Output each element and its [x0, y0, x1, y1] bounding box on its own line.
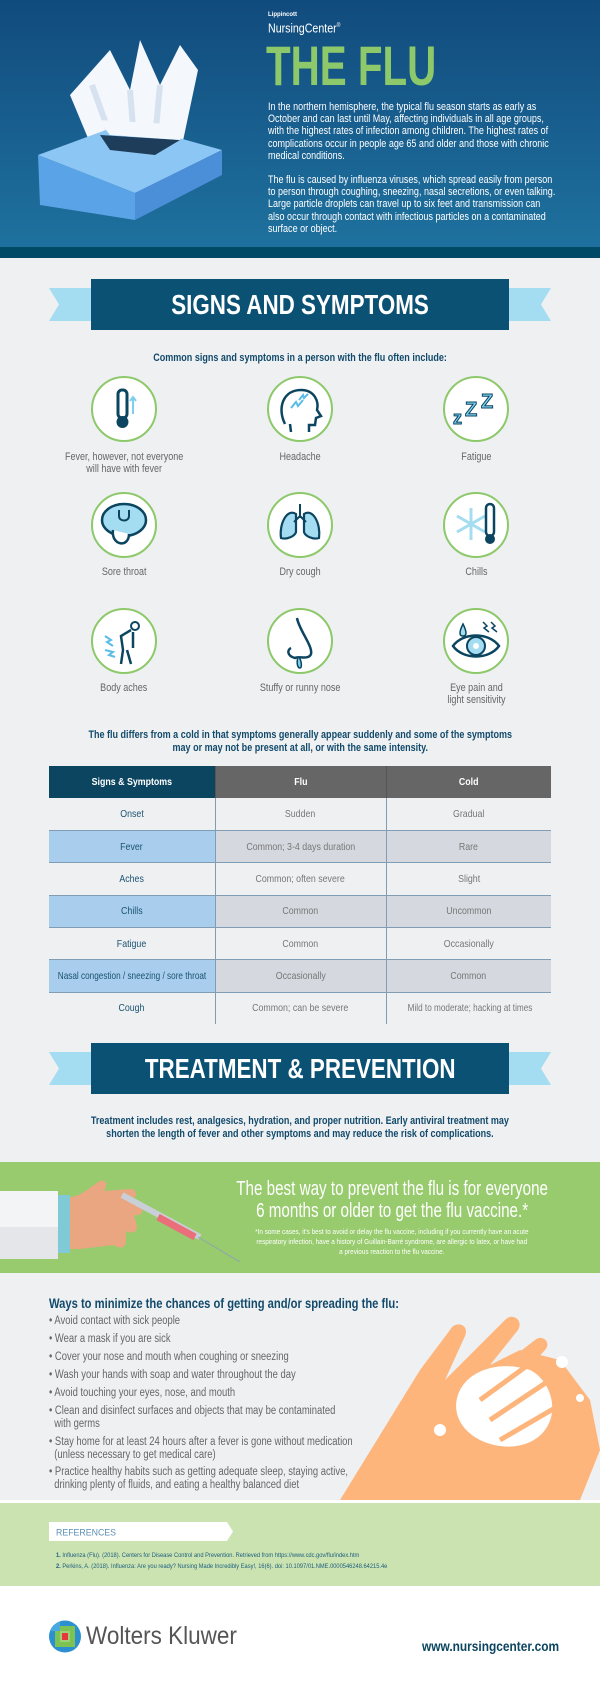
- comparison table: Occasionally: [275, 970, 326, 982]
- label: fatigue: Fatigue: [461, 451, 491, 463]
- logo: NursingCenter: Lippincott: [268, 12, 297, 18]
- vaccine footnote: [255, 1227, 529, 1256]
- prevention list: with germs: [54, 1418, 100, 1430]
- comparison table: Fatigue: [117, 938, 146, 950]
- label: fever: will have with fever: [86, 463, 162, 475]
- vaccine headline: [236, 1178, 548, 1222]
- footer url: www.nursingcenter.com: [422, 1638, 559, 1654]
- intro text: Large particle droplets can travel up to six feet and transmission can: [268, 198, 540, 210]
- references list: 2. Perkins, A. (2018). Influenza: Are you ready? Nursing Made Incredibly Easy!, 16(6). doi: 10.1097/01.NME.0000546248.64215.4e: [56, 1563, 387, 1570]
- label: fever: Fever, however, not everyone: [65, 451, 183, 463]
- label: sore throat: Sore throat: [102, 566, 146, 578]
- logo: NursingCenter: [268, 12, 340, 35]
- prevention list: • Stay home for at least 24 hours after a fever is gone without medication: [49, 1436, 353, 1448]
- comparison table: [49, 766, 551, 1024]
- comparison table: Common; 3-4 days duration: [246, 841, 355, 853]
- banner: treatment and prevention: TREATMENT & PREVENTION: [145, 1053, 455, 1084]
- intro text: with the highest rates of infection among children. The highest rates of: [268, 125, 548, 137]
- treatment text: [90, 1115, 509, 1140]
- intro text: to person through coughing, sneezing, nasal secretions, or even talking.: [268, 186, 555, 198]
- references panel: [0, 1503, 600, 1586]
- comparison intro text: [88, 729, 512, 754]
- comparison table: Cough: [119, 1002, 145, 1014]
- vaccine headline: 6 months or older to get the flu vaccine.*: [256, 1200, 528, 1222]
- intro text: In the northern hemisphere, the typical flu season starts as early as: [268, 101, 536, 113]
- comparison table: Aches: [119, 873, 144, 885]
- icon: fatigue: z: [453, 408, 462, 428]
- intro text: October and can last until May, affecting individuals in all age groups,: [268, 113, 544, 125]
- comparison table: Cold: [459, 776, 479, 788]
- icon: tissue box: [38, 40, 222, 220]
- symptom icons grid: [65, 376, 509, 706]
- label: dry cough: Dry cough: [279, 566, 321, 578]
- icon: body aches: [91, 608, 157, 674]
- vaccine footnote: a previous reaction to the flu vaccine.: [339, 1247, 445, 1256]
- logo: NursingCenter: NursingCenter®: [268, 20, 340, 35]
- comparison table: Occasionally: [444, 938, 494, 950]
- label: body aches: Body aches: [100, 682, 148, 694]
- subtitle: Common signs and symptoms in a person with the flu often include:: [153, 352, 447, 364]
- comparison table: Uncommon: [446, 905, 491, 917]
- icon: dry cough: [267, 492, 333, 558]
- prevention list: • Wash your hands with soap and water throughout the day: [49, 1369, 296, 1381]
- comparison table: Rare: [459, 841, 478, 853]
- comparison table: Nasal congestion / sneezing / sore throat: [58, 970, 206, 982]
- prevention list: • Practice healthy habits such as getting adequate sleep, staying active,: [49, 1466, 348, 1478]
- title: THE FLU: [266, 34, 436, 97]
- label: runny nose: Stuffy or runny nose: [260, 682, 340, 694]
- icon: hand with syringe: [0, 1180, 240, 1262]
- vaccine callout band: [0, 1162, 600, 1273]
- prevention list: (unless necessary to get medical care): [54, 1448, 216, 1460]
- label: eye pain: light sensitivity: [447, 694, 505, 706]
- prevention list: drinking plenty of fluids, and eating a healthy balanced diet: [54, 1478, 299, 1490]
- comparison table: Fever: [120, 841, 143, 853]
- comparison table: Slight: [458, 873, 480, 885]
- intro text: surface or object.: [268, 223, 337, 235]
- prevention list: • Wear a mask if you are sick: [49, 1333, 171, 1345]
- comparison table: Gradual: [453, 808, 484, 820]
- label: chills: Chills: [465, 566, 487, 578]
- vaccine headline: The best way to prevent the flu is for everyone: [236, 1178, 548, 1200]
- comparison table: Common; often severe: [256, 873, 345, 885]
- comparison table: Sudden: [285, 808, 316, 820]
- header panel: [0, 0, 600, 258]
- intro text: medical conditions.: [268, 150, 345, 162]
- prevention list: • Cover your nose and mouth when coughing or sneezing: [49, 1351, 289, 1363]
- label: fever: [65, 451, 183, 475]
- icon: fatigue: [443, 376, 509, 442]
- label: eye pain: Eye pain and: [450, 682, 502, 694]
- vaccine footnote: *In some cases, it's best to avoid or delay the flu vaccine, including if you currently have an acute: [255, 1227, 529, 1236]
- comparison table: Onset: [120, 808, 144, 820]
- icon: sore throat: [91, 492, 157, 558]
- comparison table: Common; can be severe: [252, 1002, 349, 1014]
- references list: 1. Influenza (Flu). (2018). Centers for Disease Control and Prevention. Retrieved from https://www.cdc.gov/flu/index.htm: [56, 1552, 359, 1559]
- prevention list: • Avoid contact with sick people: [49, 1315, 180, 1327]
- label: headache: Headache: [279, 451, 321, 463]
- list heading: Ways to minimize the chances of getting and/or spreading the flu:: [49, 1295, 399, 1311]
- treatment text: Treatment includes rest, analgesics, hydration, and proper nutrition. Early antiviral treatment may: [91, 1115, 509, 1127]
- icon: chills: [443, 492, 509, 558]
- label: eye pain: [447, 682, 506, 706]
- comparison table: Chills: [121, 905, 143, 917]
- icon: headache: [267, 376, 333, 442]
- vaccine footnote: respiratory infection, have a history of Guillain-Barré syndrome, are allergic to latex, or have had: [257, 1237, 527, 1246]
- comparison table: Mild to moderate; hacking at times: [407, 1002, 532, 1014]
- prevention list: • Avoid touching your eyes, nose, and mouth: [49, 1387, 235, 1399]
- banner: signs and symptoms: [49, 279, 551, 330]
- comparison table: Common: [283, 938, 318, 950]
- comparison table: Signs & Symptoms: [92, 776, 172, 788]
- icon: runny nose: [267, 608, 333, 674]
- references list: [56, 1552, 388, 1570]
- footer logo: Wolters Kluwer: Wolters Kluwer: [86, 1622, 237, 1650]
- comparison table: Flu: [294, 776, 307, 788]
- comparison table: Common: [451, 970, 487, 982]
- references tag: [49, 1522, 233, 1541]
- treatment text: shorten the length of fever and other symptoms and may reduce the risk of complications.: [106, 1128, 494, 1140]
- banner: signs and symptoms: SIGNS AND SYMPTOMS: [171, 289, 429, 320]
- icon: fever: [91, 376, 157, 442]
- icon: washing hands: [340, 1316, 600, 1500]
- prevention list: [49, 1295, 399, 1490]
- intro text: [268, 101, 555, 235]
- references tag: REFERENCES: [56, 1528, 116, 1538]
- comparison table: Common: [283, 905, 318, 917]
- intro text: complications occur in people age 65 and older and those with chronic: [268, 138, 549, 150]
- icon: fatigue: Z: [481, 391, 493, 413]
- intro text: The flu is caused by influenza viruses, which spread easily from person: [268, 174, 552, 186]
- prevention list: • Clean and disinfect surfaces and objects that may be contaminated: [49, 1405, 335, 1417]
- icon: fatigue: Z: [465, 399, 477, 421]
- banner: treatment and prevention: [49, 1043, 551, 1094]
- comparison intro text: The flu differs from a cold in that symptoms generally appear suddenly and some of the symptoms: [88, 729, 512, 741]
- comparison intro text: may or may not be present at all, or with the same intensity.: [172, 742, 428, 754]
- icon: eye pain: [443, 608, 509, 674]
- intro text: also occur through contact with infectious particles on a contaminated: [268, 211, 546, 223]
